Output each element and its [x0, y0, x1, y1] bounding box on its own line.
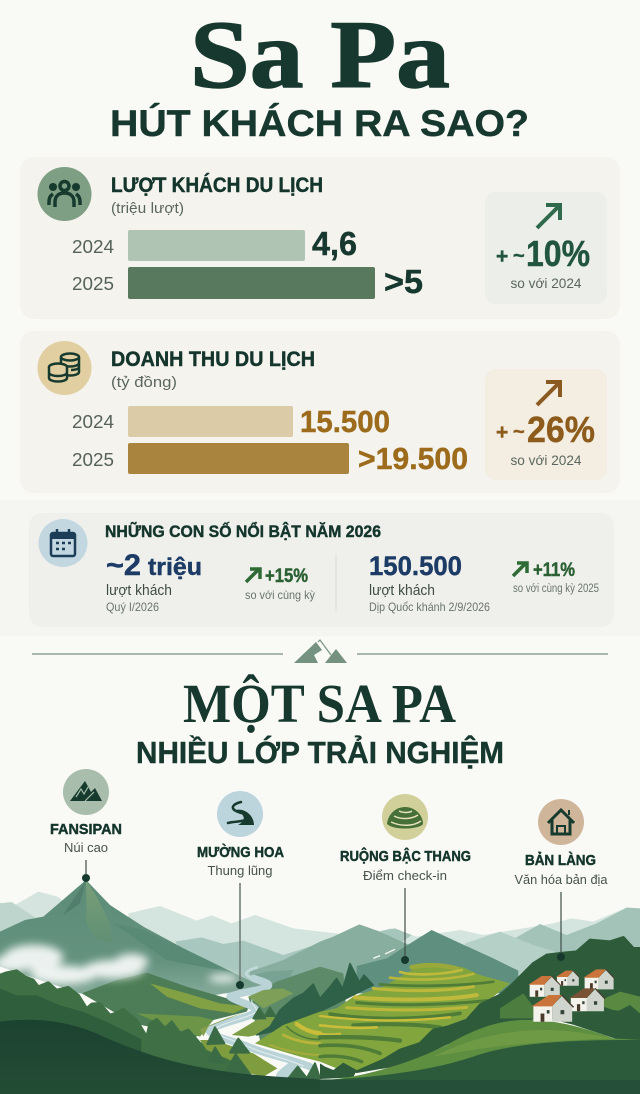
callout: revenue growth: 26% [527, 409, 595, 450]
stat: National Day growth [513, 560, 599, 595]
icon: mountains [63, 769, 109, 815]
label: Muong Hoa: MƯỜNG HOA [197, 843, 284, 861]
right forest [320, 937, 640, 1079]
callout: visitors growth: 10% [526, 233, 590, 274]
mid hills [82, 967, 347, 1040]
location: village [514, 799, 608, 961]
callout: revenue growth [485, 369, 607, 480]
rice terraces [255, 963, 510, 1073]
pointer: Fansipan [82, 860, 90, 882]
caption: rice terraces: Điểm check-in [363, 868, 447, 883]
icon: coins [38, 341, 92, 395]
callout: revenue growth: ~ [513, 421, 525, 443]
bar chart: visitors [72, 225, 423, 300]
callout: visitors growth [485, 192, 607, 304]
icon: house [538, 799, 584, 845]
caption: Fansipan: Núi cao [64, 840, 108, 855]
unit: revenue: (tỷ đồng) [111, 374, 177, 391]
title [110, 2, 529, 144]
trees near terraces [257, 963, 373, 1035]
left forest [0, 971, 320, 1080]
callout: visitors growth: ~ [513, 245, 525, 267]
river banks [232, 1015, 287, 1037]
heading: visitors: LƯỢT KHÁCH DU LỊCH [111, 174, 323, 197]
stat: Q1 visitors: ~2 [106, 549, 141, 582]
landscape illustration [0, 880, 640, 1094]
caption: Muong Hoa: Thung lũng [207, 863, 273, 878]
section subheading: NHIỀU LỚP TRẢI NGHIỆM [136, 734, 504, 770]
bar chart: visitors: 4,6 [312, 225, 357, 262]
bar chart: revenue: 2024 [72, 411, 114, 432]
callout: visitors growth: + [496, 245, 508, 268]
section heading [136, 673, 504, 770]
heading: highlights: NHỮNG CON SỐ NỔI BẬT NĂM 2026 [105, 521, 381, 541]
stat: Q1 visitors: triệu [148, 554, 202, 581]
icon: people [38, 167, 92, 221]
label: rice terraces: RUỘNG BẬC THANG [340, 847, 471, 865]
stat: National Day visitors: 150.500 [369, 551, 462, 581]
stat: National Day visitors: Dịp Quốc khánh 2/9/2026 [369, 600, 490, 614]
icon: calendar [38, 519, 88, 567]
bar chart: revenue: >19.500 [358, 441, 468, 476]
callout: revenue growth: so với 2024 [510, 452, 582, 468]
callout: revenue growth: + [496, 421, 508, 444]
village houses [528, 969, 615, 1022]
pointer: village [557, 892, 565, 961]
clouds [0, 945, 238, 984]
bar chart: visitors: 2025 [72, 273, 114, 294]
foreground dark hill left [0, 1020, 320, 1094]
icon: mountain divider [294, 640, 347, 663]
unit: visitors: (triệu lượt) [111, 200, 184, 217]
bar chart: revenue: 2025 [72, 449, 114, 470]
panel: highlights 2026 [29, 513, 614, 627]
Fansipan mountain [0, 880, 262, 997]
section heading: MỘT SA PA [183, 673, 456, 734]
stat: National Day visitors: lượt khách [369, 582, 435, 599]
stat: Q1 visitors: Quý I/2026 [106, 600, 159, 614]
location: rice terraces [340, 794, 471, 964]
panel: revenue [20, 331, 620, 493]
location: Muong Hoa [197, 791, 284, 989]
stat: Q1 visitors: lượt khách [106, 582, 172, 599]
heading: revenue: DOANH THU DU LỊCH [111, 348, 315, 371]
label: village: BẢN LÀNG [525, 852, 596, 869]
foreground dark hill right [320, 1040, 640, 1094]
bar chart: visitors: >5 [384, 263, 423, 300]
title: Sa Pa [190, 2, 450, 109]
bar chart: revenue: 15.500 [300, 404, 390, 439]
stat: National Day visitors [369, 551, 490, 614]
stat: Q1 growth: so với cùng kỳ [245, 588, 315, 602]
bar chart: visitors: 2024 [72, 236, 114, 257]
panel: visitors [20, 157, 620, 319]
icon: terraces [382, 794, 428, 840]
pointer: Muong Hoa [236, 883, 244, 989]
icon: river [217, 791, 263, 837]
caption: village: Văn hóa bản địa [514, 872, 608, 887]
bar chart: revenue [72, 404, 468, 476]
river [208, 967, 310, 1077]
pointer: rice terraces [401, 888, 409, 964]
subtitle: HÚT KHÁCH RA SAO? [110, 102, 529, 144]
callout: visitors growth: so với 2024 [510, 275, 582, 291]
stat: National Day growth: +11% [533, 560, 575, 581]
stat: National Day growth: so với cùng kỳ 2025 [513, 583, 599, 595]
stat: Q1 visitors [106, 549, 202, 614]
stat: Q1 growth [245, 566, 315, 602]
stat: Q1 growth: +15% [265, 566, 308, 587]
label: Fansipan: FANSIPAN [50, 821, 122, 838]
right green hill [333, 1020, 640, 1080]
location: Fansipan [50, 769, 122, 882]
far mountains [0, 892, 640, 993]
